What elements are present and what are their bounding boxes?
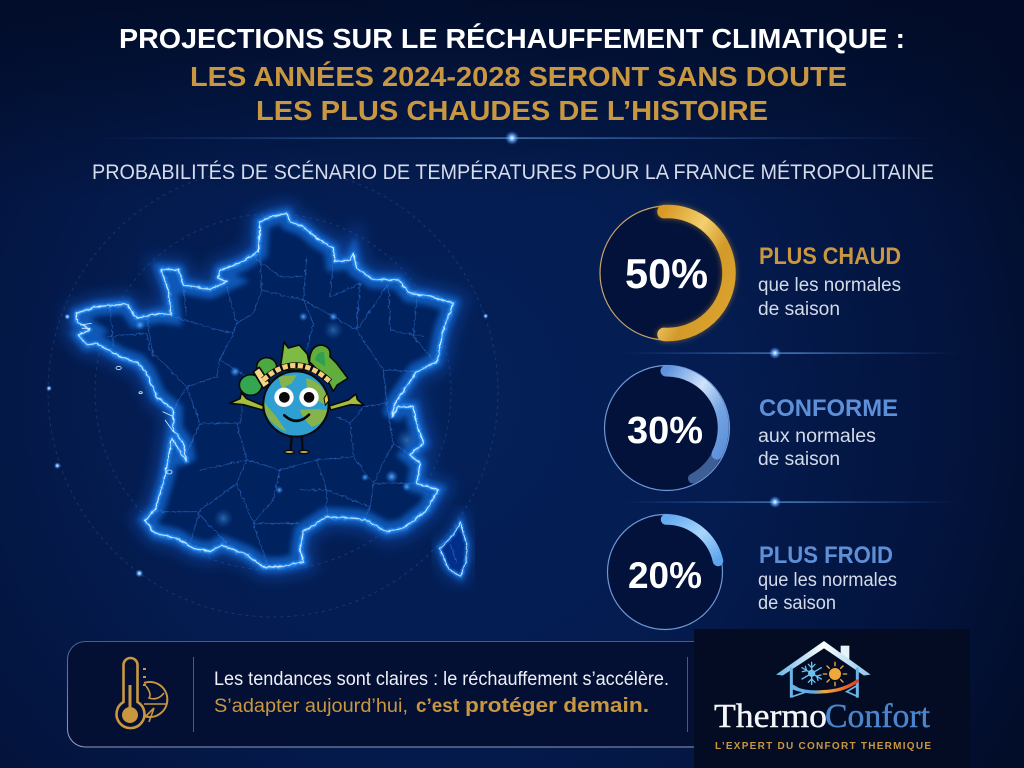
icon: house with snowflake and sun [777,642,869,698]
legs [291,436,303,451]
message text: protéger demain. [465,695,649,717]
title [119,23,905,126]
label: plus chaud: de saison [758,299,840,320]
title: PROJECTIONS SUR LE RÉCHAUFFEMENT CLIMATIQUE : [119,23,905,54]
ring: 50% plus chaud [600,206,734,340]
map of France [46,213,488,577]
label: plus froid [758,542,897,614]
label: conforme: CONFORME [759,395,898,422]
glowing coastline [77,213,467,577]
icon: thermometer and globe [117,658,167,728]
title: LES PLUS CHAUDES DE L’HISTOIRE [256,95,768,126]
label: conforme [758,395,898,470]
label: plus froid: PLUS FROID [759,542,893,569]
outer sparkles [46,313,488,577]
message text: S’adapter aujourd’hui, [214,696,408,717]
radar circles [48,167,498,617]
eyes [274,388,294,407]
label: conforme: de saison [758,449,840,470]
label: conforme: aux normales [758,426,876,447]
message text: c’est [416,696,460,717]
label: plus froid: que les normales [758,570,897,591]
logo tagline: L’EXPERT DU CONFORT THERMIQUE [715,741,931,752]
label: plus froid: de saison [758,593,836,614]
sun [829,668,841,680]
ring: 30% conforme [604,366,730,490]
subtitle: PROBABILITÉS DE SCÉNARIO DE TEMPÉRATURES POUR LA FRANCE MÉTROPOLITAINE [92,161,934,184]
label: plus chaud [758,243,901,320]
logo: ThermoConfort: Confort [825,698,931,735]
ring: 20% plus froid: 20% [628,555,702,596]
ring: 20% plus froid [608,514,722,630]
logo wordmark: Thermo [714,698,827,735]
ring: 50% plus chaud: 50% [625,250,708,297]
mascot: earth character [229,342,364,454]
crown [253,367,270,388]
logo: ThermoConfort [694,629,970,768]
smile [284,415,309,421]
globe [263,371,329,437]
arms [229,393,364,410]
city lights [135,312,418,528]
islands [80,323,173,474]
trees [239,342,348,395]
regional borders [107,253,457,563]
title: LES ANNÉES 2024-2028 SERONT SANS DOUTE [190,61,847,92]
ring: 30% conforme: 30% [627,410,703,452]
message text: Les tendances sont claires : le réchauffement s’accélère. [214,669,669,690]
snowflake [802,662,821,684]
label: plus chaud: que les normales [758,275,901,296]
bottom message panel [68,642,728,747]
label: plus chaud: PLUS CHAUD [759,243,901,270]
message text [214,669,669,717]
